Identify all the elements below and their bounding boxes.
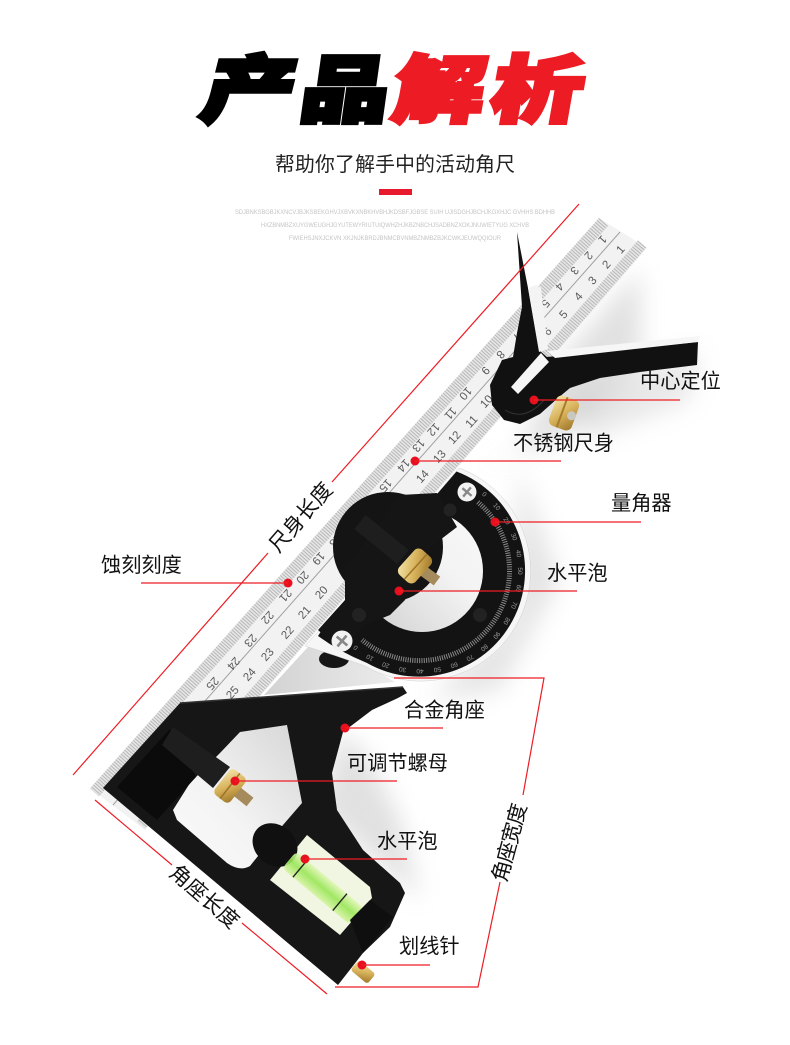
ruler numbers: upper row: 20 — [293, 568, 311, 586]
decorative English text block: SDJBNKSBGBJKXNCVJBJKSBEKGHVJXBVKXNBKHVBHJKDSBFJGBSE SUIH UJISDGHJBCHJKGXHJC GVHHS BDHHB — [235, 209, 555, 216]
protractor white rim — [305, 468, 531, 681]
ruler numbers: upper row: 9 — [478, 364, 492, 376]
callout: level bubble top: 水平泡 — [547, 562, 608, 585]
soft product shadows — [320, 270, 700, 900]
ruler numbers: upper row: 16 — [359, 494, 377, 512]
green level vial — [282, 851, 364, 925]
degree numbers: 30 — [398, 665, 407, 673]
screw lower — [332, 630, 352, 652]
callout: centre locating: 中心定位 — [640, 370, 721, 393]
centre finder head — [490, 232, 700, 432]
callout: alloy base — [340, 699, 485, 732]
ruler numbers: lower row: 25 — [224, 684, 242, 702]
callout: etched scale — [101, 554, 292, 588]
ruler numbers: upper row: 21 — [276, 586, 294, 604]
ruler numbers: upper row — [203, 233, 609, 692]
ruler numbers: lower row: 3 — [586, 275, 600, 287]
ruler numbers: lower row: 12 — [446, 429, 464, 447]
base upper edge highlight — [180, 687, 403, 703]
dimension: ruler length: 尺身长度 — [265, 478, 337, 557]
callout: etched scale: 蚀刻刻度 — [101, 554, 182, 577]
protractor lower dome — [319, 650, 349, 668]
degree numbers: 80 — [479, 642, 489, 652]
title: 析 — [485, 50, 590, 132]
degree numbers: 20 — [381, 660, 391, 669]
ruler numbers: lower row: 23 — [259, 646, 277, 664]
ruler numbers: upper row: 4 — [552, 280, 566, 293]
base cylinder bar — [162, 727, 230, 788]
subtitle: 帮助你了解手中的活动角尺 — [275, 154, 515, 176]
degree numbers: 0 — [480, 491, 488, 499]
protractor clamp block — [318, 493, 457, 650]
ruler numbers: lower row: 20 — [313, 584, 331, 602]
ruler numbers: upper row: 10 — [456, 384, 474, 402]
degree numbers: 60 — [514, 584, 522, 593]
brass scriber pin — [350, 960, 376, 984]
decorative English text block — [235, 209, 555, 242]
callout: stainless ruler: 不锈钢尺身 — [513, 432, 614, 455]
degree numbers: 90 — [491, 630, 501, 640]
callout: alloy base: 合金角座 — [404, 699, 485, 722]
brass adjustable nut — [212, 767, 250, 805]
ruler numbers: upper row: 11 — [442, 405, 458, 421]
ruler numbers: upper row: 14 — [394, 456, 412, 474]
ruler numbers: lower row — [224, 244, 628, 702]
protractor central hole — [361, 510, 483, 632]
degree tick arc — [362, 502, 510, 661]
degree numbers: 0 — [352, 643, 360, 651]
dimension: base length: 角座长度 — [165, 861, 243, 933]
ruler numbers: upper row: 13 — [409, 436, 427, 454]
degree numbers: 50 — [516, 567, 523, 575]
ruler numbers: lower row: 1 — [614, 244, 628, 256]
ruler numbers: lower row: 10 — [478, 393, 496, 411]
callout: stainless ruler — [410, 432, 614, 466]
combination square base — [103, 687, 407, 985]
dimension: base width: 角座宽度 — [489, 801, 532, 884]
level bump — [244, 814, 306, 876]
dimension: ruler length — [73, 204, 579, 775]
decorative English text block: HXZBNMBZXUYGWEUGHJGYUTEWYRIUTUIQWHZHJKBZNBCHJSADBNZXOKJNUWIETYUG XCHVB — [261, 222, 529, 229]
ruler numbers: upper row: 15 — [376, 476, 394, 494]
ruler numbers: upper row: 5 — [538, 297, 552, 309]
ruler numbers: upper row: 2 — [581, 249, 595, 261]
degree numbers: 60 — [449, 660, 459, 669]
white blade edges — [528, 285, 548, 352]
ruler numbers: upper row: 8 — [493, 348, 507, 360]
ruler numbers: lower row: 22 — [279, 624, 297, 642]
dimension: base length — [95, 800, 327, 994]
ruler numbers: upper row: 24 — [224, 654, 242, 672]
callout: level bubble base — [300, 830, 438, 864]
degree numbers: 50 — [433, 665, 441, 673]
ruler numbers: upper row: 3 — [567, 264, 581, 276]
degree numbers: 40 — [416, 667, 424, 674]
ruler numbers: lower row: 24 — [241, 666, 259, 684]
brass thumb nut — [547, 394, 581, 432]
callout: level bubble base: 水平泡 — [377, 830, 438, 853]
degree numbers: 40 — [514, 550, 522, 558]
degree numbers: 10 — [491, 502, 501, 512]
callout: protractor — [490, 492, 672, 526]
base recessed block — [117, 729, 196, 820]
ruler numbers: upper row: 22 — [258, 608, 276, 626]
screw upper — [458, 482, 476, 502]
degree numbers: 30 — [509, 532, 518, 542]
ruler numbers: lower row: 13 — [431, 448, 449, 466]
ruler numbers: upper row: 23 — [241, 631, 259, 649]
decorative English text block: FWIEHSJNXJCKVN XKJNJKBRDJBNMCBVNMBZNMBZBJKCWKJEUWQQIOUR — [289, 235, 501, 242]
shadow between ruler and base — [264, 636, 395, 695]
ruler: stainless steel blade — [90, 218, 647, 830]
brass clamp nut — [395, 546, 437, 586]
degree numbers: 80 — [501, 616, 511, 626]
ruler numbers: lower row: 2 — [600, 259, 614, 271]
degree numbers: 10 — [365, 652, 375, 662]
ruler numbers: lower row: 6 — [541, 326, 555, 338]
callout: protractor: 量角器 — [611, 492, 672, 515]
ruler numbers: upper row: 7 — [509, 331, 523, 343]
level vial window — [270, 835, 372, 935]
ruler numbers: upper row: 1 — [595, 233, 609, 245]
ruler numbers: lower row: 11 — [464, 414, 480, 430]
callout: level bubble top — [394, 562, 608, 596]
degree numbers: 70 — [465, 652, 475, 662]
callout: scriber: 划线针 — [399, 935, 460, 958]
ruler numbers: lower row: 21 — [296, 604, 314, 622]
callout: scriber — [358, 935, 460, 970]
degree numbers: 20 — [501, 516, 511, 526]
level plug — [350, 900, 393, 953]
base opening with shadow — [173, 725, 302, 868]
ruler numbers: upper row: 25 — [203, 674, 221, 692]
title: 解 — [387, 50, 492, 132]
ruler numbers: upper row: 12 — [424, 420, 442, 438]
title: 产 — [194, 50, 305, 132]
ruler numbers: upper row: 18 — [326, 531, 344, 549]
dimension: base width — [335, 678, 544, 987]
callout: adjustable nut: 可调节螺母 — [347, 752, 448, 775]
red accent bar — [379, 189, 412, 195]
protractor black ring — [318, 472, 525, 677]
degree numbers — [352, 491, 523, 674]
title — [194, 50, 590, 132]
ruler numbers: lower row: 4 — [572, 290, 586, 303]
ruler numbers: upper row: 17 — [343, 512, 361, 530]
ruler numbers: upper row: 19 — [309, 549, 327, 567]
callout: centre locating — [530, 370, 721, 404]
ruler numbers: lower row: 5 — [557, 309, 571, 321]
ruler numbers: lower row: 14 — [414, 468, 432, 486]
callout: adjustable nut — [230, 752, 448, 786]
title: 品 — [296, 50, 395, 132]
protractor — [305, 468, 531, 681]
protractor half disc — [333, 492, 443, 602]
degree numbers: 70 — [509, 600, 518, 610]
